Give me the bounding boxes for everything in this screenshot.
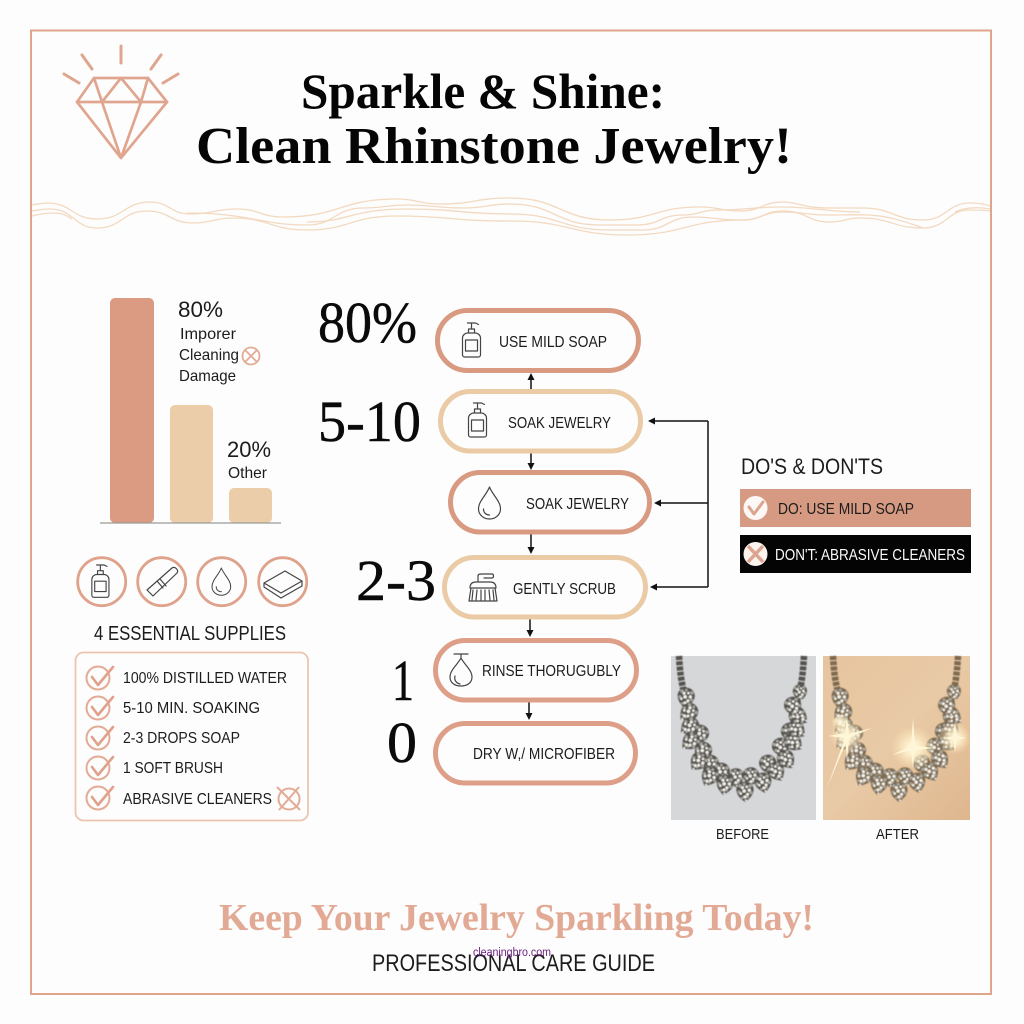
big numbers: 5-10 xyxy=(318,389,421,454)
callout: don't: DON'T: ABRASIVE CLEANERS xyxy=(775,547,965,564)
photo: necklace after xyxy=(823,656,971,820)
step: soak jewelry drop xyxy=(450,472,650,532)
item: distilled water: 100% DISTILLED WATER xyxy=(123,670,287,687)
supplies icons row xyxy=(78,558,307,606)
item: drops of soap: 2-3 DROPS SOAP xyxy=(123,730,240,747)
step: soak jewelry drop: SOAK JEWELRY xyxy=(526,496,629,513)
callout: don't xyxy=(740,535,971,573)
big numbers: 1 xyxy=(392,648,414,713)
item: drops of soap xyxy=(86,726,240,750)
icon: folded cloth xyxy=(259,558,307,606)
label: 20% other: 20% xyxy=(227,437,271,462)
photo: necklace before xyxy=(671,656,816,820)
icon: scrub brush xyxy=(469,574,497,601)
item: distilled water xyxy=(86,666,287,690)
step: soak jewelry bottle xyxy=(440,392,640,451)
icon: diamond logo xyxy=(64,46,178,158)
bar: middle value xyxy=(170,405,213,523)
bar: other 20% xyxy=(229,488,272,523)
footer headline: Keep Your Jewelry Sparkling Today! xyxy=(219,897,814,939)
heading: do's and don'ts: DO'S & DON'TS xyxy=(741,454,883,479)
item: soaking time: 5-10 MIN. SOAKING xyxy=(123,700,260,717)
label: 80% improper cleaning damage xyxy=(178,297,260,385)
caption: before: BEFORE xyxy=(716,826,769,843)
icon: soft brush xyxy=(138,558,186,606)
decorative wave band xyxy=(32,198,990,235)
label: 20% other xyxy=(227,437,271,482)
label: 80% improper cleaning damage: 80% xyxy=(178,297,223,322)
heading: 4 essential supplies: 4 ESSENTIAL SUPPLIES xyxy=(94,623,286,645)
item: soft brush xyxy=(86,756,223,780)
item: abrasive cleaners: ABRASIVE CLEANERS xyxy=(123,791,272,808)
icon: soap bottle xyxy=(78,558,126,606)
title: Clean Rhinstone Jewelry! xyxy=(196,118,792,175)
label: 80% improper cleaning damage: Imporer xyxy=(180,326,237,343)
title xyxy=(196,63,792,175)
label: 20% other: Other xyxy=(228,465,268,482)
big numbers: 80% xyxy=(318,290,417,355)
step: rinse thoroughly xyxy=(436,640,636,700)
caption: after: AFTER xyxy=(876,826,919,843)
sparkles xyxy=(827,713,971,788)
step: gently scrub xyxy=(444,558,646,617)
watermark: cleaningbro.com xyxy=(473,947,551,959)
flow arrows xyxy=(526,373,708,720)
callout: do: DO: USE MILD SOAP xyxy=(778,501,914,518)
icon: water drop xyxy=(198,558,246,606)
bar chart: cleaning damage xyxy=(100,297,281,523)
big numbers: 2-3 xyxy=(356,548,436,613)
step: use mild soap xyxy=(438,310,638,370)
big numbers: 0 xyxy=(387,710,417,775)
item: soft brush: 1 SOFT BRUSH xyxy=(123,760,223,777)
label: 80% improper cleaning damage: Damage xyxy=(179,368,236,385)
step: rinse thoroughly: RINSE THORUGUBLY xyxy=(482,663,621,680)
step: dry with microfiber xyxy=(436,724,636,783)
item: soaking time xyxy=(86,696,260,720)
big numbers xyxy=(318,290,436,775)
panel: supplies checklist xyxy=(76,652,308,820)
icon: rinse drop xyxy=(450,654,472,686)
step: dry with microfiber: DRY W,/ MICROFIBER xyxy=(473,746,615,763)
footer subtitle: PROFESSIONAL CARE GUIDE xyxy=(372,950,655,977)
item: abrasive cleaners xyxy=(86,786,300,810)
callout: do xyxy=(740,489,971,527)
title: Sparkle & Shine: xyxy=(301,63,665,119)
step: gently scrub: GENTLY SCRUB xyxy=(513,581,616,598)
step: use mild soap: USE MILD SOAP xyxy=(499,334,607,351)
bar: improper cleaning 80% xyxy=(110,298,154,523)
step: soak jewelry bottle: SOAK JEWELRY xyxy=(508,415,611,432)
label: 80% improper cleaning damage: Cleaning xyxy=(179,347,239,364)
